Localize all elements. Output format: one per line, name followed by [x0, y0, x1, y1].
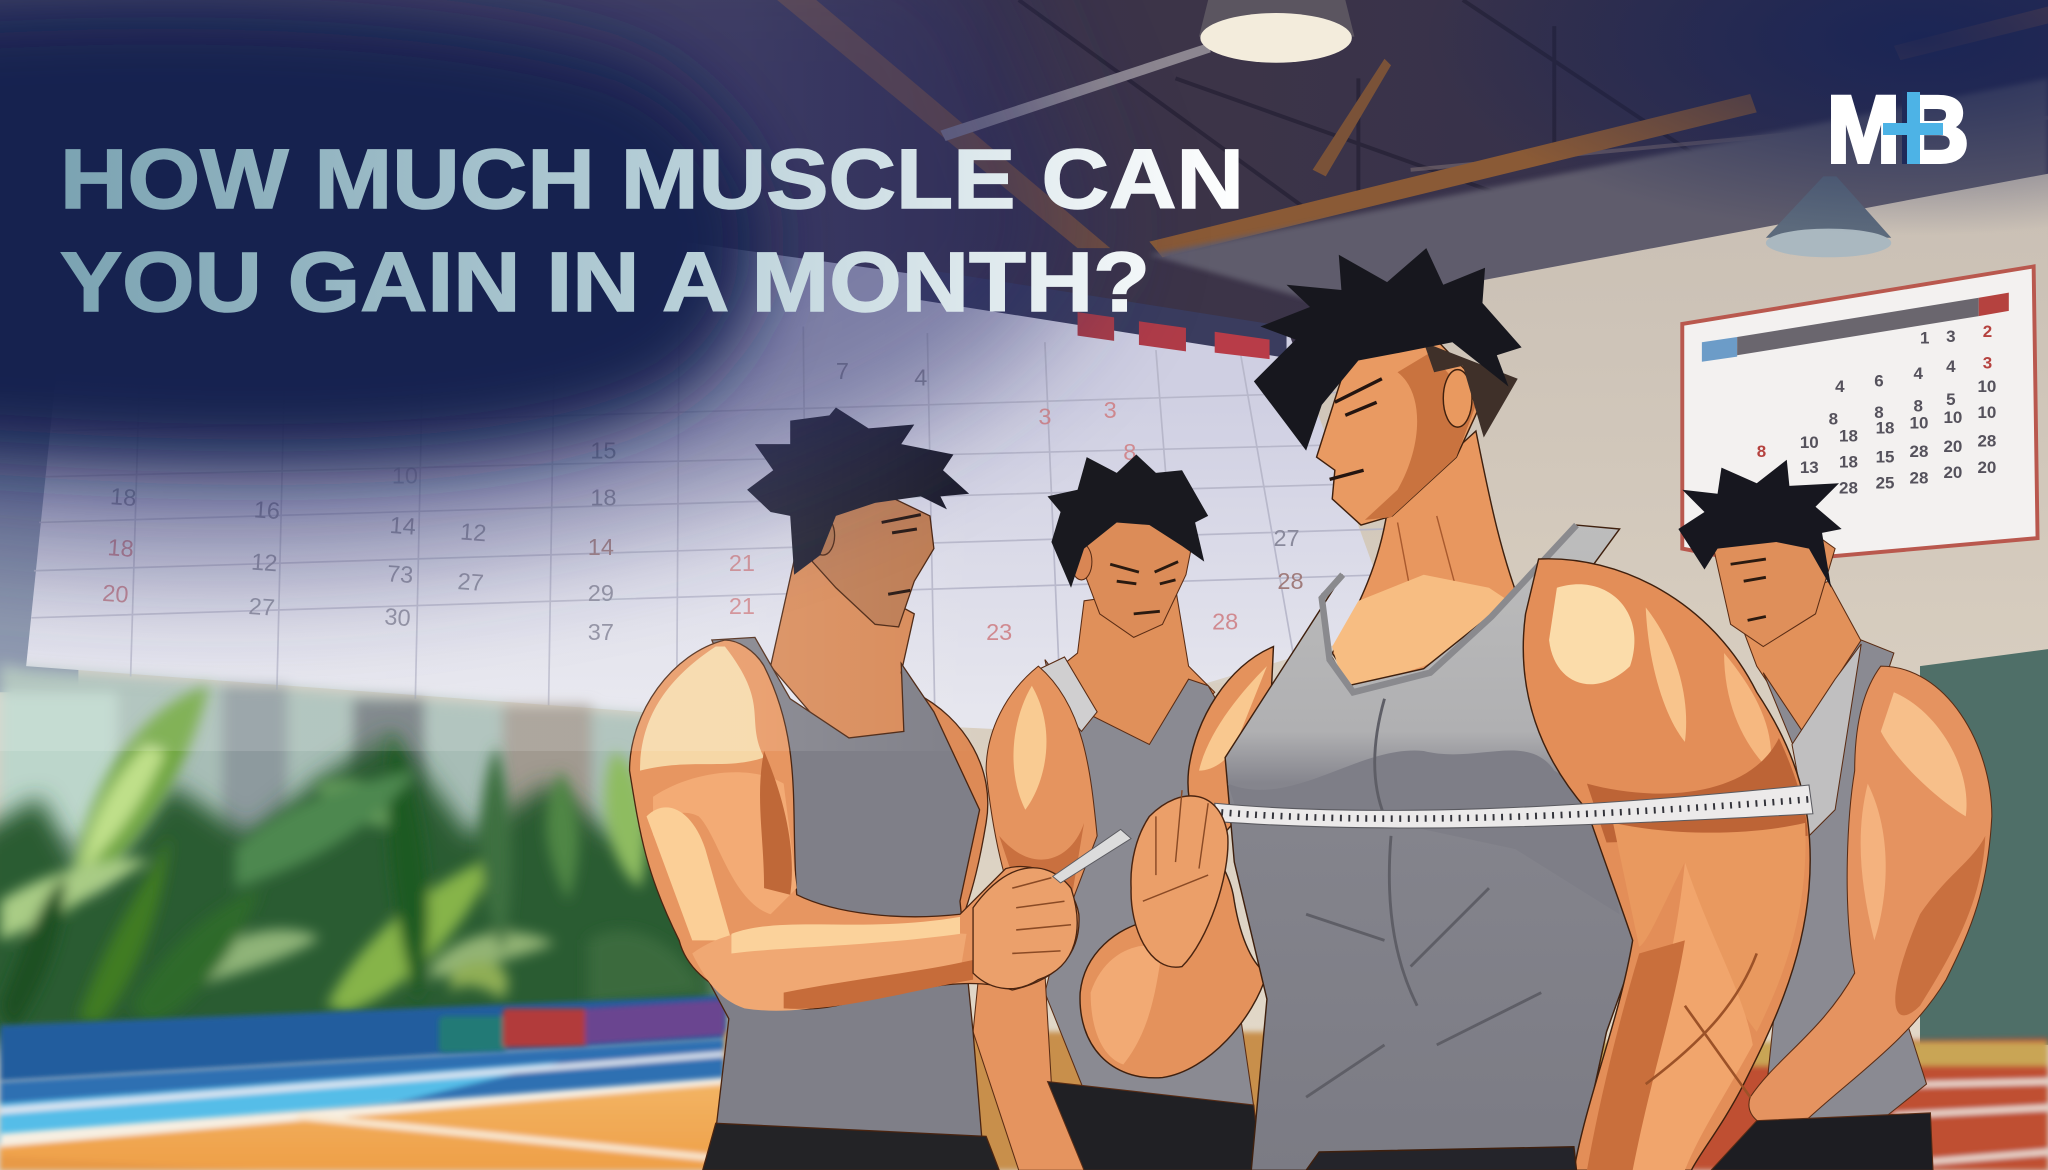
neck [1045, 588, 1215, 771]
shorts [1711, 1113, 1933, 1170]
logo [1827, 77, 1969, 183]
tank folds [1306, 699, 1541, 1097]
lower wall [1920, 649, 2048, 1045]
hair [1678, 460, 1842, 588]
wall calendar: 4 [1835, 377, 1845, 396]
wall calendar: 20 [1944, 437, 1962, 456]
back wall [725, 174, 2048, 1045]
blue court floor [0, 1038, 725, 1143]
face details [882, 515, 921, 594]
distant lamp [1766, 176, 1891, 257]
face details [1731, 559, 1766, 620]
wall calendar: 28 [1839, 479, 1858, 498]
wall calendar: 3 [1946, 327, 1956, 346]
centre floor fragment [725, 1032, 1567, 1170]
shorts [1048, 1081, 1260, 1170]
wall calendar: 10 [1977, 403, 1996, 422]
wall calendar: 1 [1920, 329, 1929, 348]
hair [1048, 455, 1208, 588]
title [60, 132, 1244, 329]
chest in neckline [1332, 575, 1528, 692]
wall calendar: 25 [1876, 473, 1894, 492]
large wall calendar: 8 [1123, 439, 1136, 465]
head [1078, 516, 1195, 637]
ceiling lamp [1199, 0, 1354, 63]
tank top [1225, 525, 1639, 1170]
large wall calendar: 21 [729, 550, 755, 576]
neck and chest [1737, 581, 1868, 744]
wall calendar: 28 [1910, 468, 1928, 487]
ceiling [0, 0, 2048, 418]
shorts [703, 1123, 999, 1170]
large wall calendar [26, 157, 1395, 731]
large wall calendar: 27 [1273, 525, 1300, 551]
large wall calendar: 14 [588, 534, 614, 560]
deltoid highlight [1549, 584, 1634, 684]
ear [1443, 370, 1472, 427]
neck [771, 549, 914, 758]
far arm and forearm [1080, 647, 1273, 1078]
near arm [1523, 559, 1810, 1170]
title line 2: YOU GAIN IN A MONTH? [60, 235, 1150, 329]
wall calendar: 4 [1946, 357, 1956, 376]
hair [1254, 248, 1522, 451]
wall calendar: 2 [1983, 322, 1992, 341]
blue wall padding [0, 995, 725, 1081]
wall calendar: 5 [1946, 390, 1956, 409]
large wall calendar: 15 [590, 437, 617, 463]
dark foliage mass [0, 731, 718, 1045]
large wall calendar: 3 [1038, 403, 1051, 429]
ear [1071, 543, 1092, 580]
wall calendar: 10 [1800, 433, 1819, 452]
large wall calendar: 12 [250, 549, 278, 576]
head [1714, 516, 1835, 647]
tropical plants [0, 686, 718, 1045]
forearm highlight [1620, 862, 1753, 1170]
undercut [1424, 342, 1518, 438]
wall calendar: 8 [1874, 403, 1884, 422]
tank top [1763, 640, 1927, 1121]
wall calendar: 28 [1910, 442, 1928, 461]
wall calendar: 20 [1977, 458, 1996, 477]
orange court floor [0, 1078, 725, 1170]
large wall calendar: 16 [253, 496, 281, 524]
wall calendar: 10 [1910, 413, 1928, 432]
wall calendar: 8 [1757, 442, 1766, 461]
large wall calendar: 4 [914, 364, 927, 390]
ear [811, 516, 835, 555]
arm [1749, 666, 1992, 1134]
large wall calendar: 23 [986, 619, 1012, 645]
wall calendar: 20 [1944, 463, 1962, 482]
near arm [630, 640, 1079, 1009]
wall calendar: 18 [1839, 426, 1858, 445]
wall calendar [1682, 266, 2038, 563]
wall calendar: 28 [1977, 432, 1996, 451]
wall calendar: 6 [1874, 372, 1884, 391]
navy title shape [0, 6, 762, 462]
wall calendar: 18 [1839, 453, 1858, 472]
large wall calendar: 14 [389, 512, 417, 540]
middle background man [973, 455, 1260, 1170]
face details [1330, 379, 1382, 479]
hair [747, 408, 969, 575]
wall calendar: 18 [1876, 419, 1894, 438]
tank neckline trim [1322, 525, 1576, 692]
right background man [1678, 460, 1992, 1170]
large wall calendar: 7 [836, 358, 849, 384]
tank top [666, 637, 982, 1143]
logo: M [1827, 77, 1900, 183]
wall calendar: 13 [1800, 458, 1819, 477]
front man [1080, 248, 1810, 1170]
large wall calendar: 27 [457, 568, 485, 596]
neck [1332, 431, 1526, 692]
wall calendar: 3 [1983, 353, 1992, 372]
pale band over left side [0, 0, 993, 751]
large wall calendar: 73 [386, 560, 414, 588]
wall calendar: 10 [1977, 377, 1996, 396]
arm [973, 666, 1097, 1170]
tank shadow [1228, 751, 1620, 914]
wall calendar: 8 [1913, 396, 1923, 415]
head [812, 483, 934, 627]
large wall calendar: 18 [109, 483, 137, 511]
large wall calendar: 18 [107, 534, 135, 562]
arm shadow [1587, 738, 1808, 842]
far arm [901, 692, 988, 914]
front man's fist [1131, 790, 1228, 967]
large wall calendar: 18 [590, 484, 617, 510]
foliage leaves [0, 686, 705, 1032]
title line 1: HOW MUCH MUSCLE CAN [60, 132, 1244, 226]
window backdrop [0, 664, 731, 1032]
top-right navy shade [1306, 0, 2048, 274]
wall band under ceiling [1149, 78, 2048, 313]
shorts waistband [1306, 1147, 1576, 1170]
wall calendar: 10 [1944, 408, 1962, 427]
wall calendar: 4 [1913, 364, 1923, 383]
large wall calendar: 10 [392, 462, 418, 488]
logo: B [1903, 77, 1969, 183]
left man's fist [973, 868, 1077, 989]
wall calendar: 15 [1876, 447, 1894, 466]
large wall calendar: 28 [1212, 609, 1238, 635]
large wall calendar: 27 [248, 593, 276, 621]
large wall calendar: 28 [1277, 568, 1304, 594]
large wall calendar: 29 [588, 580, 614, 606]
gym mats [439, 999, 725, 1053]
large wall calendar: 3 [1104, 397, 1117, 423]
large wall calendar: 12 [459, 518, 487, 546]
head [1317, 327, 1486, 525]
face details [1110, 562, 1178, 614]
left strip beyond calendar [0, 392, 78, 692]
measuring tape [1053, 785, 1813, 883]
large wall calendar: 30 [384, 603, 412, 631]
right floor [1567, 1038, 2048, 1170]
wall calendar: 8 [1829, 409, 1838, 428]
left man [630, 408, 1079, 1170]
wide purple-navy haze [0, 0, 1097, 570]
large wall calendar: 37 [588, 619, 614, 645]
tank top [1045, 660, 1254, 1108]
large wall calendar: 21 [729, 593, 755, 619]
large wall calendar: 20 [102, 580, 129, 608]
